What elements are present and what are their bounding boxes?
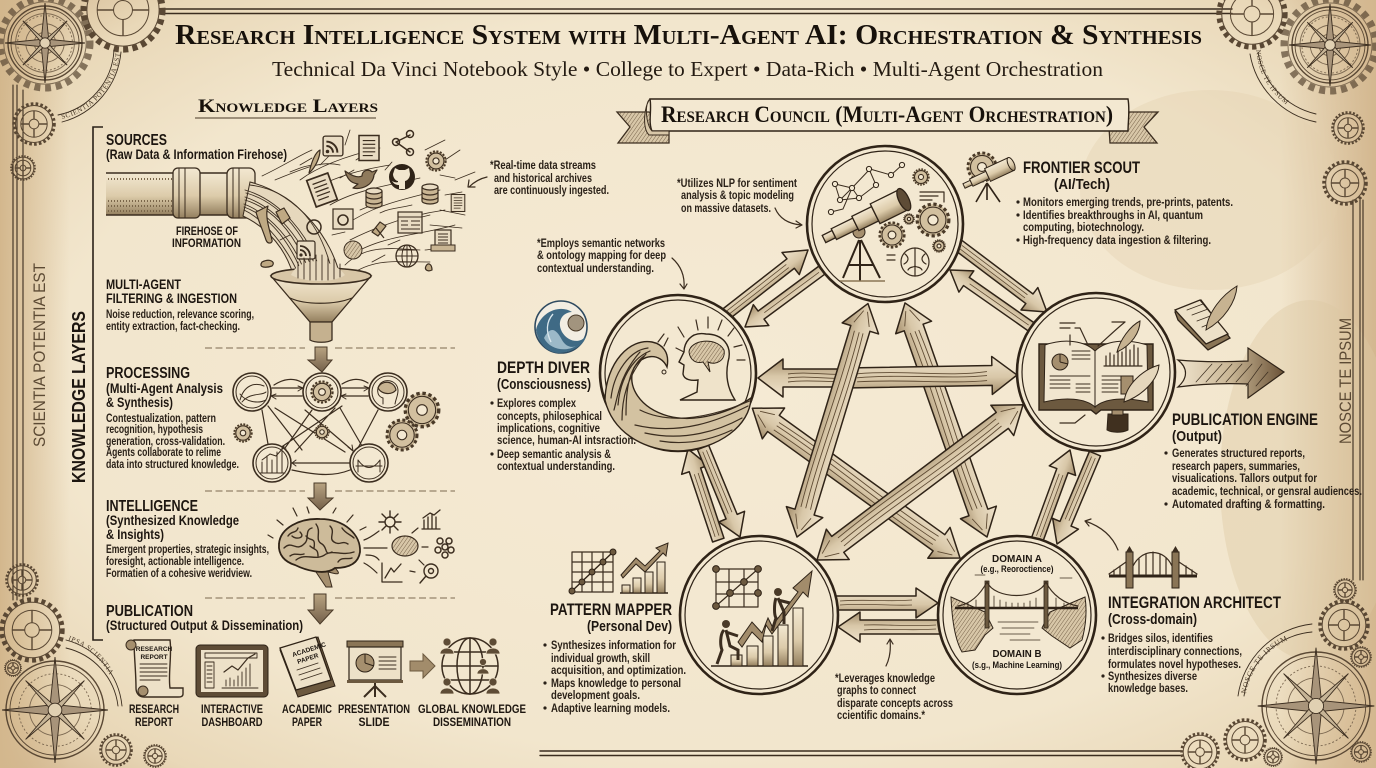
illustration: bridge between domains <box>951 553 1086 670</box>
processing text <box>106 365 239 471</box>
node: pattern mapper circle <box>680 536 838 694</box>
icon: data stream spray <box>243 130 475 282</box>
arrow: depth to frontier <box>714 239 817 328</box>
arrow: depth to integration star line <box>741 393 971 573</box>
pattern mapper bullets <box>543 638 686 715</box>
frontier scout bullets: High-frequency data ingestion & filtering. <box>1023 233 1211 247</box>
publication text <box>106 603 303 633</box>
depth diver bullets: contextual understanding. <box>497 459 615 473</box>
output: academic paper: ACADEMIC <box>282 702 332 716</box>
corner ornament: top right compass and gears <box>1216 0 1376 206</box>
frontier scout heading: FRONTIER SCOUT <box>1023 158 1140 177</box>
panel: depth diver <box>490 301 636 473</box>
illustration: bridge between domains: (s.g., Machine Learning) <box>972 660 1062 670</box>
integration architect bullets <box>1101 631 1242 695</box>
panel: publication engine <box>1164 286 1362 511</box>
arrow: frontier to pattern star line <box>779 298 886 543</box>
arrow: depth to publication horizontal right <box>852 356 1017 397</box>
intelligence text: (Synthesized Knowledge <box>106 512 239 528</box>
intelligence text: foresight, actionable intelligence. <box>106 554 244 568</box>
knowledge layers heading: Knowledge Layers <box>198 96 378 117</box>
arrow: to processing <box>308 347 332 372</box>
pattern mapper heading: PATTERN MAPPER <box>550 600 672 619</box>
illustration: open book with quills and inkwell <box>1039 321 1159 432</box>
depth diver heading: DEPTH DIVER <box>497 358 590 377</box>
corner ornament: bottom right compass and gears <box>1180 578 1374 768</box>
corner ornament: bottom left compass and gears <box>0 563 167 768</box>
pattern mapper bullets: acquisition, and optimization. <box>551 663 686 677</box>
frontier scout bullets <box>1016 195 1233 247</box>
depth diver bullets: Explores complex <box>497 396 576 410</box>
banner: research council <box>617 99 1158 143</box>
output: academic paper <box>280 637 335 729</box>
callout: frontier scout note <box>677 176 802 228</box>
corner ornament: top left compass and gears <box>0 0 166 181</box>
publication engine bullets: visualications. Tallors output for <box>1172 471 1317 485</box>
intelligence text: INTELLIGENCE <box>106 498 198 515</box>
arrow: publication to pattern star line <box>806 390 1034 575</box>
depth diver bullets <box>490 396 636 473</box>
frontier scout bullets: Identifies breakthroughs in AI, quantum <box>1023 208 1203 222</box>
output: research report: RESEARCH <box>136 646 173 653</box>
panel: pattern mapper <box>543 543 686 715</box>
pattern mapper heading: (Personal Dev) <box>587 618 672 635</box>
output: research report: REPORT <box>140 654 168 661</box>
side motto: right: NOSCE TE IPSUM <box>1336 318 1355 444</box>
arrow: integration to publication <box>1024 445 1083 545</box>
output: presentation slide: SLIDE <box>358 715 390 729</box>
multi-agent filtering text <box>106 276 254 333</box>
integration architect bullets: interdisciplinary connections, <box>1108 644 1242 658</box>
processing text: Agents collaborate to relime <box>106 445 221 459</box>
callout: integration note <box>835 639 953 722</box>
callout: real-time data: and historical archives <box>494 171 592 185</box>
icon: funnel <box>271 255 371 342</box>
arrow: pattern to integration <box>836 588 938 618</box>
vertical layers bracket and label <box>69 127 103 640</box>
multi-agent filtering text: MULTI-AGENT <box>106 276 181 292</box>
sources text <box>106 132 287 162</box>
arrow: publication output <box>1178 348 1284 398</box>
node: depth diver circle <box>600 295 756 451</box>
processing network diagram <box>233 373 439 482</box>
icon: telescope and gear <box>961 153 1017 202</box>
frontier scout bullets: computing, biotechnology. <box>1023 220 1144 234</box>
arrow: to intelligence <box>308 483 333 510</box>
integration architect bullets: Bridges silos, identifies <box>1108 631 1213 645</box>
arrow: depth to pattern <box>690 442 753 542</box>
pattern mapper bullets: Adaptive learning models. <box>551 701 670 715</box>
illustration: wave <box>605 334 752 451</box>
vertical layers bracket and label: KNOWLEDGE LAYERS <box>69 311 89 483</box>
illustration: grid with data points <box>713 566 761 609</box>
callout: integration note: ccientific domains.* <box>837 708 925 722</box>
publication engine heading <box>1172 410 1318 445</box>
publication text: PUBLICATION <box>106 603 193 620</box>
processing text: PROCESSING <box>106 365 190 382</box>
node: publication engine circle <box>1017 293 1175 451</box>
arrow: frontier to publication <box>949 233 1055 323</box>
depth diver bullets: implications, cognitive <box>497 421 600 435</box>
icon: firehose pipe <box>106 168 255 250</box>
output: interactive dashboard <box>196 645 268 729</box>
icon: firehose pipe: FIREHOSE OF <box>176 226 238 238</box>
callout: real-time data: are continuously ingested. <box>494 183 609 197</box>
side motto: left: SCIENTIA POTENTIA EST <box>30 263 49 447</box>
depth diver bullets: science, human-AI intsraction. <box>497 433 636 447</box>
sources text: SOURCES <box>106 132 167 149</box>
publication engine bullets: Automated drafting & formatting. <box>1172 497 1325 511</box>
callout: depth diver note: contextual understanding. <box>537 261 654 275</box>
output: global knowledge dissemination: GLOBAL KNOWLEDGE <box>418 702 526 716</box>
callout: integration note: *Leverages knowledge <box>835 671 935 685</box>
layer separators <box>205 348 455 598</box>
intelligence text <box>106 498 269 580</box>
corner ornament: top left compass and gears: SCIENTIA POTENTIA EST <box>62 52 120 119</box>
integration architect heading: INTEGRATION ARCHITECT <box>1108 593 1281 612</box>
integration architect heading: (Cross-domain) <box>1108 611 1197 628</box>
illustration: rising bars and climbers <box>711 571 812 666</box>
output: presentation slide <box>338 641 410 729</box>
corner ornament: bottom right compass and gears: NOSCE TE IPSUM <box>1241 636 1288 694</box>
arrow: frontier to depth <box>737 259 830 337</box>
output: research report: RESEARCH <box>129 702 179 716</box>
icon: firehose pipe: INFORMATION <box>172 238 241 250</box>
arrow: integration to pattern <box>838 612 940 642</box>
arrows between agents <box>675 233 1108 642</box>
publication engine heading: PUBLICATION ENGINE <box>1172 410 1318 429</box>
illustration: bridge between domains: (e.g., Reoroctience) <box>980 564 1054 574</box>
banner: research council: Research Council (Multi-Agent Orchestration) <box>661 102 1113 127</box>
callout: depth diver note: *Employs semantic networks <box>537 236 665 250</box>
publication engine heading: (Output) <box>1172 428 1222 445</box>
frontier scout heading: (AI/Tech) <box>1054 176 1110 193</box>
title: Research Intelligence System with Multi-Agent AI: Orchestration & Synthesis <box>175 19 1202 51</box>
integration architect bullets: Synthesizes diverse <box>1108 669 1197 683</box>
icon: grid trend and rising chart <box>569 543 668 594</box>
arrow: pattern to depth <box>675 445 732 545</box>
illustration: data network and gears <box>828 162 949 276</box>
frontier scout bullets: Monitors emerging trends, pre-prints, patents. <box>1023 195 1233 209</box>
depth diver bullets: concepts, philosephical <box>497 409 602 423</box>
publication engine bullets: Generates structured reports, <box>1172 446 1305 460</box>
node: frontier scout circle <box>807 146 963 302</box>
arrow: to dissemination <box>410 654 435 678</box>
callout: real-time data: *Real-time data streams <box>490 158 596 172</box>
callout: integration note: graphs to connect <box>837 683 916 697</box>
panel: integration architect <box>1085 519 1281 695</box>
callout: frontier scout note: on massive datasets. <box>681 201 771 215</box>
integration architect bullets: formulates novel hypotheses. <box>1108 657 1241 671</box>
processing text: recognition, hypothesis <box>106 422 203 436</box>
arrow: callout to integration circle <box>1085 519 1118 550</box>
arrow: publication to integration <box>1044 448 1108 549</box>
integration architect heading <box>1108 593 1281 628</box>
depth diver heading: (Consciousness) <box>497 376 591 393</box>
output: research report <box>126 640 183 729</box>
icon: bridge <box>1109 546 1197 588</box>
pattern mapper bullets: individual growth, skill <box>551 651 650 665</box>
depth diver heading <box>497 358 591 393</box>
output: interactive dashboard: INTERACTIVE <box>201 702 263 716</box>
icon: book and quill <box>1175 286 1237 350</box>
processing text: generation, cross-validation. <box>106 434 225 448</box>
callout: frontier scout note: analysis & topic modeling <box>681 188 794 202</box>
arrow: to publication <box>308 594 333 624</box>
processing text: Contestualization, pattern <box>106 411 216 425</box>
callout: integration note: disparate concepts across <box>837 696 953 710</box>
depth diver bullets: Deep semantic analysis & <box>497 447 611 461</box>
publication engine bullets <box>1164 446 1362 511</box>
illustration: bridge between domains: DOMAIN A <box>992 553 1042 565</box>
corner ornament: top right compass and gears: NOSCE TE IPSUM <box>1256 50 1289 104</box>
output: global knowledge dissemination <box>418 638 526 729</box>
panel: knowledge layers <box>69 96 526 729</box>
callout: frontier scout note: *Utilizes NLP for sentiment <box>677 176 797 190</box>
processing text: (Multi-Agent Analysis <box>106 380 223 396</box>
processing text: & Synthesis) <box>106 394 173 410</box>
pattern mapper bullets: development goals. <box>551 688 640 702</box>
multi-agent filtering text: entity extraction, fact-checking. <box>106 319 240 333</box>
intelligence text: Formatien of a cohesive weridview. <box>106 566 252 580</box>
subtitle: Technical Da Vinci Notebook Style • College to Expert • Data-Rich • Multi-Agent Orchestration <box>272 57 1103 81</box>
corner ornament: bottom left compass and gears: IPSA SCIENTIA <box>68 636 113 675</box>
frontier scout heading <box>1023 158 1140 193</box>
sources text: (Raw Data & Information Firehose) <box>106 146 287 162</box>
pattern mapper bullets: Synthesizes information for <box>551 638 676 652</box>
illustration: bridge between domains: DOMAIN B <box>992 648 1042 660</box>
output: research report: REPORT <box>135 715 174 729</box>
pattern mapper bullets: Maps knowledge to personal <box>551 676 681 690</box>
callout: depth diver note <box>537 236 687 289</box>
output: academic paper: PAPER <box>296 652 320 666</box>
arrow: frontier to integration star line <box>887 297 1005 543</box>
multi-agent filtering text: Noise reduction, relevance scoring, <box>106 307 254 321</box>
panel: frontier scout <box>961 153 1233 247</box>
publication text: (Structured Output & Dissemination) <box>106 617 303 633</box>
publication engine bullets: research papers, summaries, <box>1172 459 1300 473</box>
output: academic paper: PAPER <box>292 715 322 729</box>
output: presentation slide: PRESENTATION <box>338 702 410 716</box>
multi-agent filtering text: FILTERING & INGESTION <box>106 290 237 306</box>
arrow: publication to frontier <box>943 259 1039 338</box>
callout: real-time data <box>468 158 609 197</box>
pattern mapper heading <box>550 600 672 635</box>
processing text: data into structured knowledge. <box>106 457 239 471</box>
callout: depth diver note: & ontology mapping for deep <box>537 248 666 262</box>
illustration: head with brain <box>676 317 745 400</box>
node: integration architect circle <box>938 536 1096 694</box>
icon: wave and brain medallion <box>535 301 587 353</box>
icon: brain <box>268 507 366 587</box>
integration architect bullets: knowledge bases. <box>1108 681 1188 695</box>
output: academic paper: ACADEMIC <box>291 641 327 659</box>
intelligence text: & Insights) <box>106 526 164 542</box>
output: global knowledge dissemination: DISSEMINATION <box>433 715 511 729</box>
insight sub-icons <box>364 510 454 583</box>
illustration: telescope on tripod <box>819 187 914 281</box>
output: interactive dashboard: DASHBOARD <box>202 715 263 729</box>
intelligence text: Emergent properties, strategic insights, <box>106 542 269 556</box>
arrow: publication to depth horizontal left <box>758 359 853 397</box>
